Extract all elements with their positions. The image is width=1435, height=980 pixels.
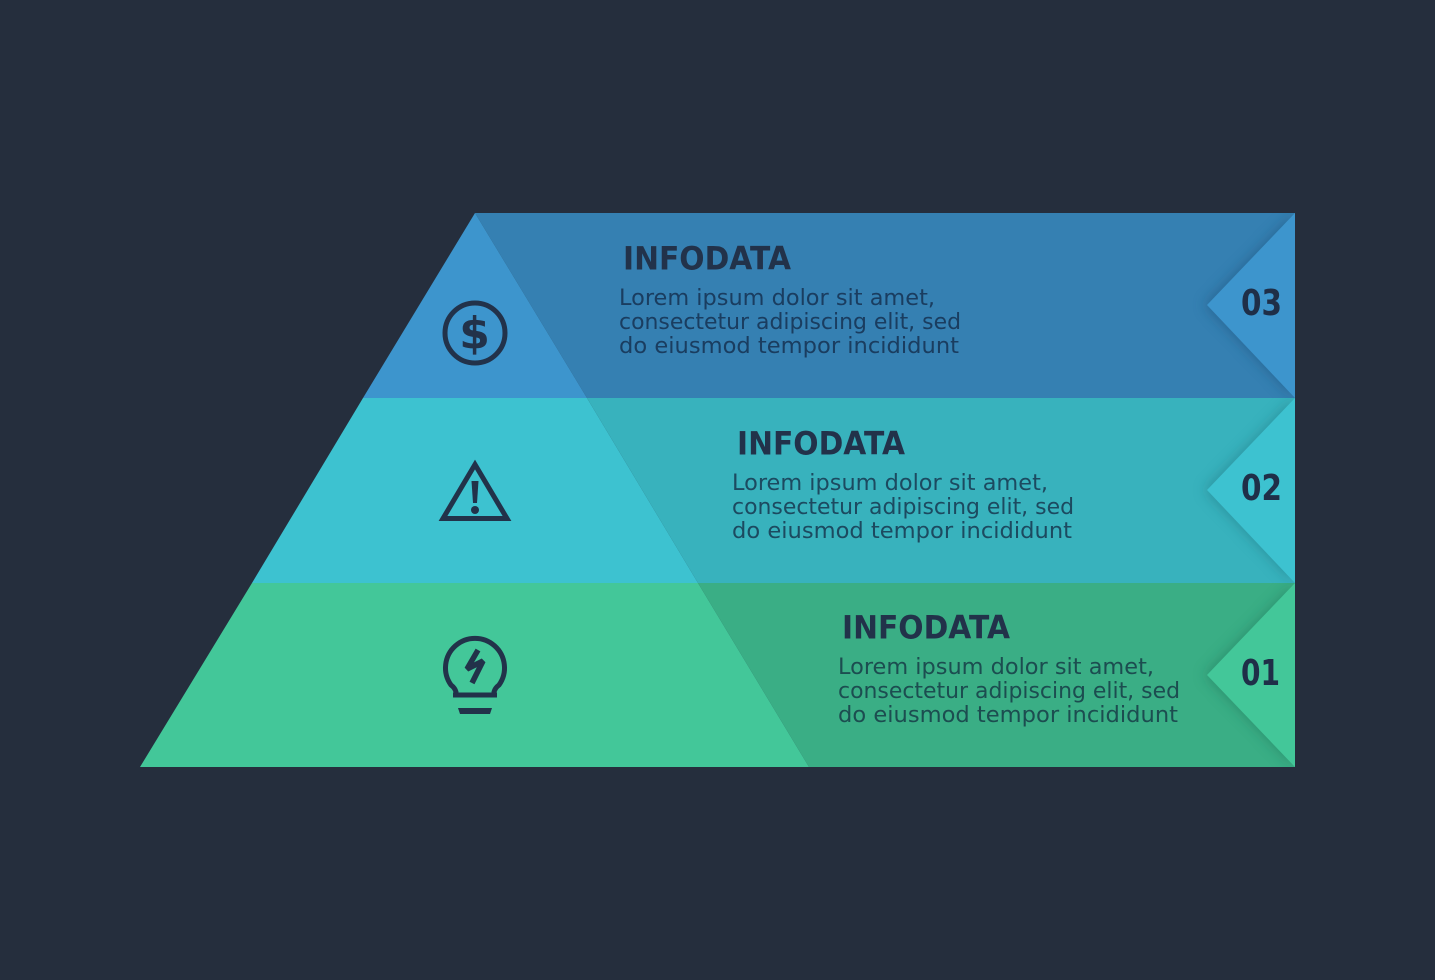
band 03 background (475, 213, 1295, 398)
band 01 body text: do eiusmod tempor incididunt (838, 703, 1178, 728)
band 02 arrow tab (1207, 398, 1295, 583)
band 03 body text: consectetur adipiscing elit, sed (619, 310, 961, 335)
band 02 background (587, 398, 1295, 583)
band 01 arrow tab (1207, 583, 1295, 767)
icon: dollar coin: $ (459, 308, 490, 359)
band 02 number: 02 (1241, 468, 1282, 509)
icon: light bulb (446, 638, 504, 714)
band 01 body text: consectetur adipiscing elit, sed (838, 679, 1180, 704)
band 02 body text: consectetur adipiscing elit, sed (732, 495, 1074, 520)
band 01 body text: Lorem ipsum dolor sit amet, (838, 655, 1154, 680)
icon: dollar coin (445, 303, 505, 363)
band 01 body text (838, 655, 1180, 728)
band 01 heading: INFODATA (842, 608, 1010, 646)
band 02 pyramid segment (252, 398, 698, 583)
panel: band 01 (140, 583, 1295, 767)
panel: band 03 (363, 213, 1295, 398)
band 01 number: 01 (1241, 653, 1280, 694)
panel: band 02 (252, 398, 1295, 583)
band 03 body text (619, 286, 961, 359)
band 02 body text: Lorem ipsum dolor sit amet, (732, 471, 1048, 496)
icon: warning triangle (443, 464, 507, 518)
band 02 arrow shadow (1205, 398, 1295, 583)
band 01 pyramid segment (140, 583, 809, 767)
band 02 body text (732, 471, 1074, 544)
band 03 body text: Lorem ipsum dolor sit amet, (619, 286, 935, 311)
band 03 number: 03 (1241, 283, 1282, 324)
band 01 arrow shadow (1206, 588, 1290, 762)
band 01 background (698, 583, 1295, 767)
band 02 heading: INFODATA (737, 424, 905, 462)
band 03 arrow shadow (1205, 213, 1295, 398)
band 03 pyramid segment (363, 213, 587, 398)
band 03 body text: do eiusmod tempor incididunt (619, 334, 959, 359)
band 03 arrow tab (1207, 213, 1295, 398)
band 02 body text: do eiusmod tempor incididunt (732, 519, 1072, 544)
band 03 heading: INFODATA (623, 240, 791, 278)
